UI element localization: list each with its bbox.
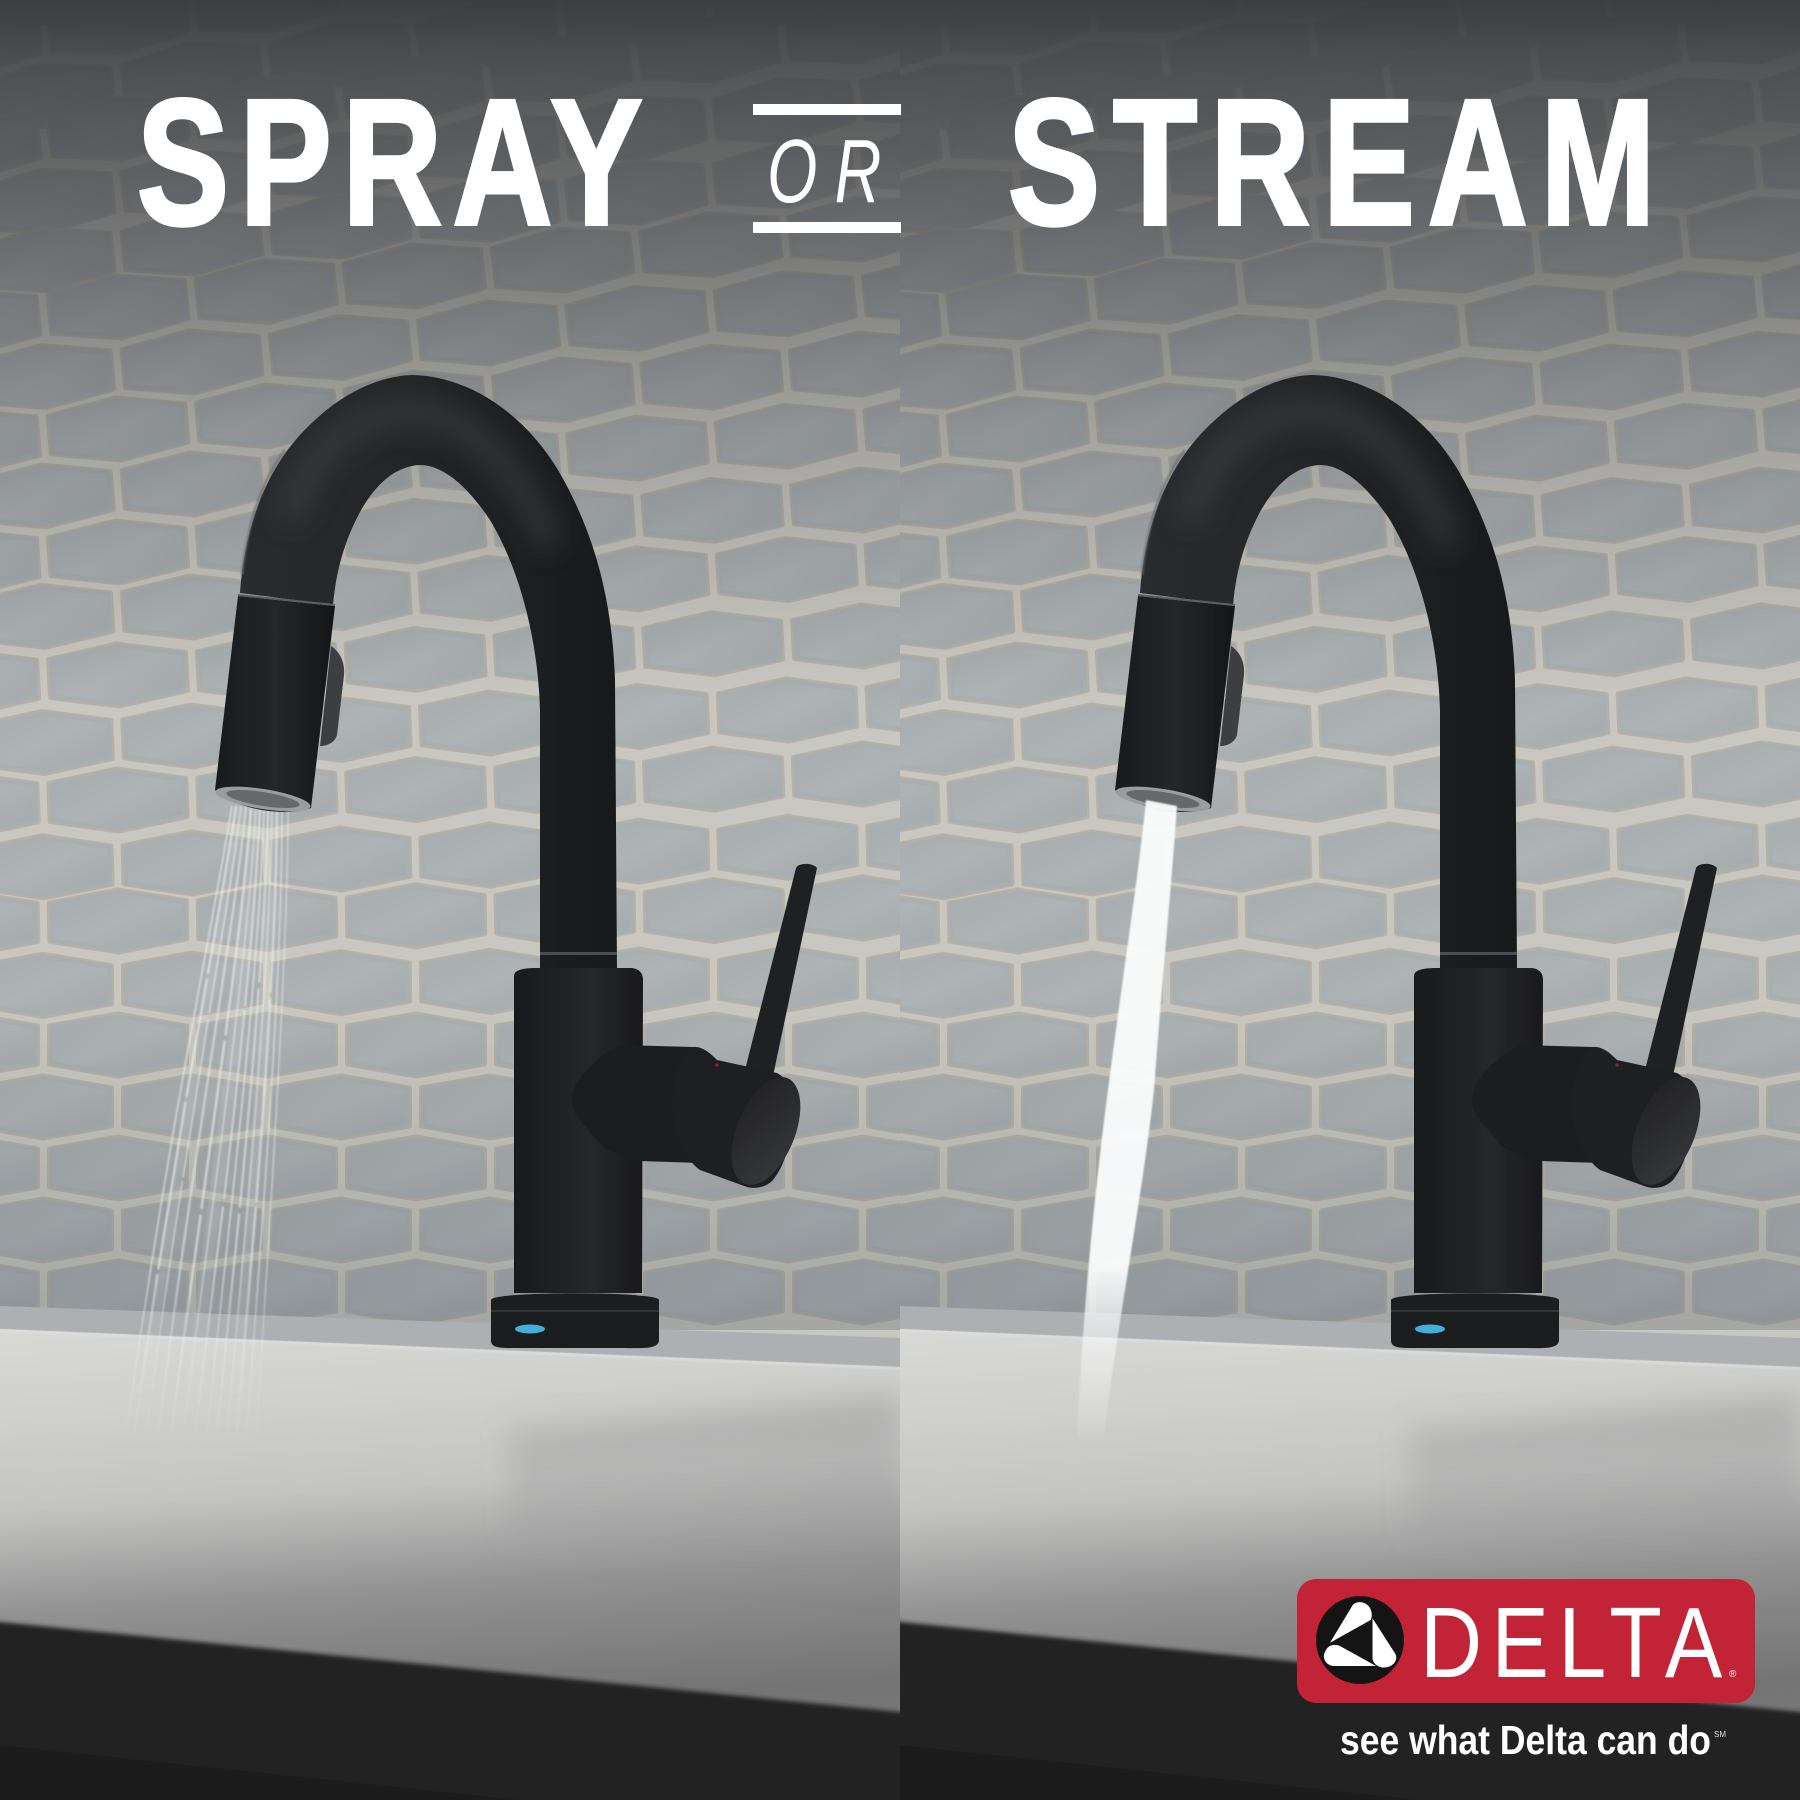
heading: OR with rules: OR — [767, 121, 899, 222]
tagline: see what Delta can do — [1340, 1717, 1711, 1763]
tiled wall and sink background — [900, 0, 1800, 1715]
tiled wall and sink background — [0, 0, 900, 1715]
icon: Delta triangle emblem — [1316, 1596, 1404, 1684]
spray water strands — [138, 806, 290, 1370]
tagline: SM — [1714, 1730, 1726, 1739]
panel: stream (right half) — [900, 0, 1800, 1715]
faucet: right — [1114, 375, 1717, 1348]
faucet: left — [214, 375, 817, 1348]
logo red badge — [1297, 1579, 1755, 1703]
heading: SPRAY: SPRAY — [137, 62, 653, 262]
logo wordmark: DELTA — [1420, 1587, 1732, 1698]
heading: STREAM: STREAM — [1008, 62, 1668, 262]
panel: spray (left half) — [0, 0, 900, 1715]
registered mark: ® — [1729, 1669, 1737, 1680]
solid stream of water — [1077, 800, 1177, 1438]
heading: OR with rules — [753, 104, 901, 233]
logo: Delta — [1297, 1579, 1755, 1703]
